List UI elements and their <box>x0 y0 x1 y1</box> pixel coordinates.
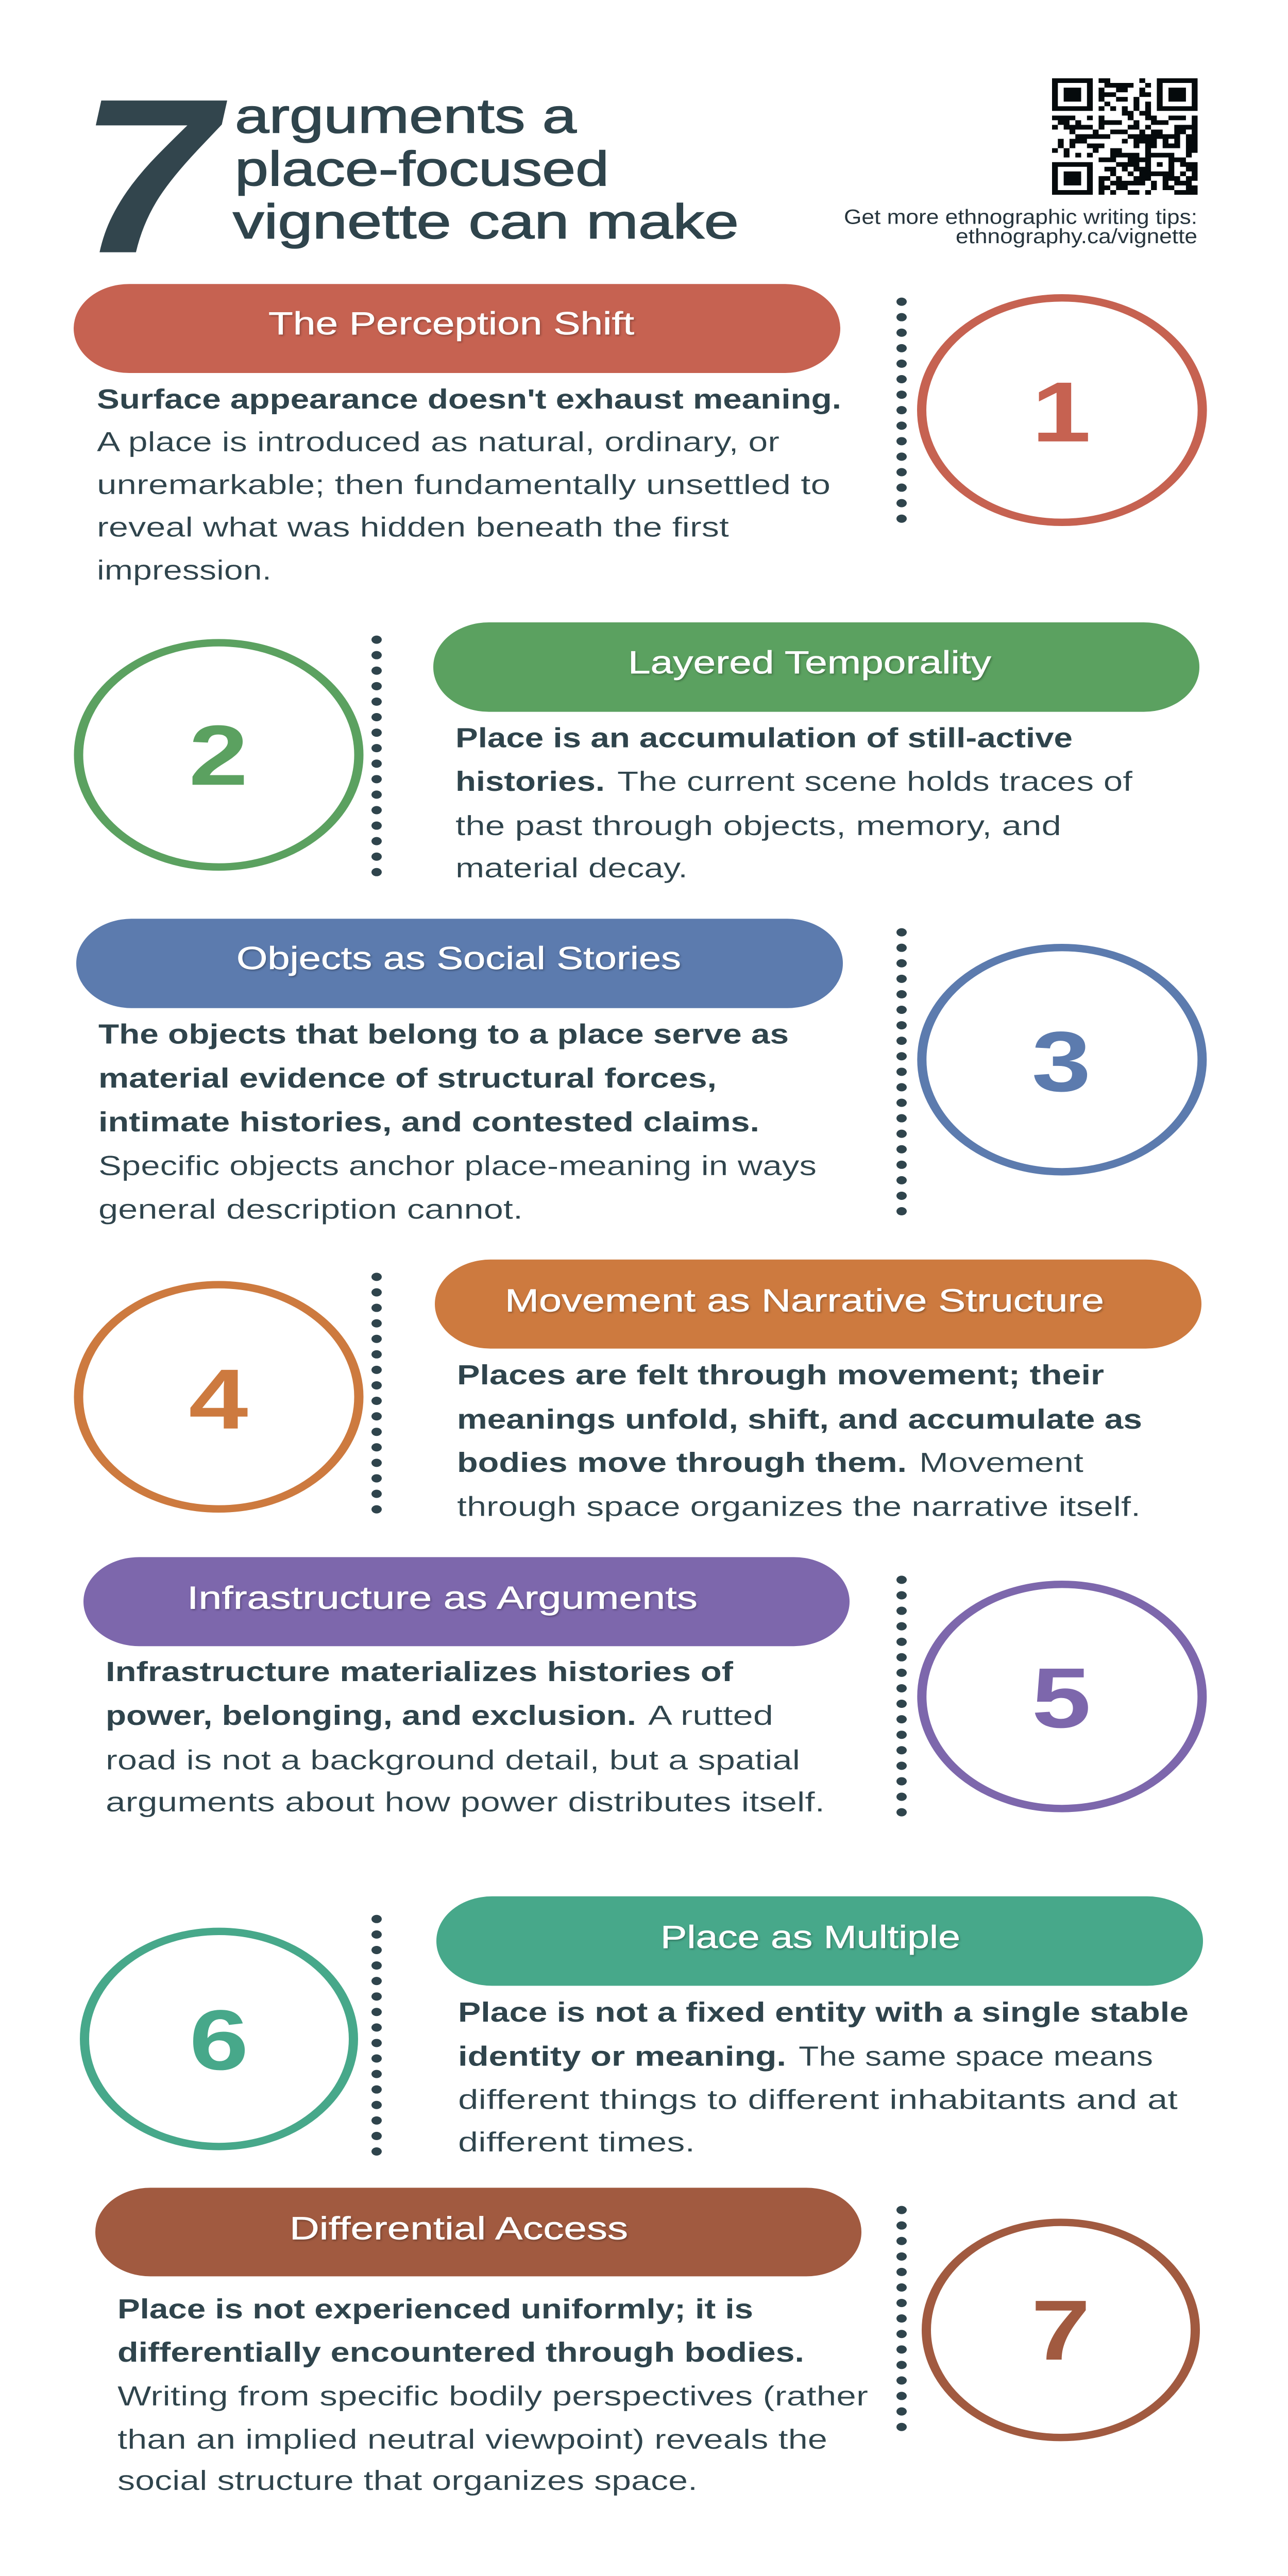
number badge 2: 2 <box>189 707 248 803</box>
body text: The same space means <box>799 2041 1153 2072</box>
body text: than an implied neutral viewpoint) reveals the <box>117 2424 827 2454</box>
body text: histories. <box>455 766 605 797</box>
title text: place-focused <box>235 141 609 196</box>
number badge 4: 4 <box>189 1351 248 1447</box>
panel: Movement as Narrative Structure <box>78 1260 1201 1522</box>
body text: different things to different inhabitants and at <box>458 2084 1178 2115</box>
credit text: ethnography.ca/vignette <box>956 225 1197 248</box>
dotted divider <box>371 640 382 873</box>
dotted divider <box>896 2210 907 2443</box>
body text <box>458 1996 1189 2157</box>
heading pill: Movement as Narrative Structure <box>505 1282 1104 1318</box>
credit text <box>844 205 1197 248</box>
number badge 6: 6 <box>189 1992 249 2088</box>
credit text: Get more ethnographic writing tips: <box>844 205 1197 228</box>
heading pill <box>433 622 1199 712</box>
number badge 5: 5 <box>1031 1650 1091 1745</box>
number badge 3 <box>922 947 1202 1172</box>
body text: general description cannot. <box>98 1194 523 1225</box>
body text: Place is not a fixed entity with a single stable <box>458 1996 1189 2027</box>
number badge 7: 7 <box>1031 2282 1091 2378</box>
body text: material evidence of structural forces, <box>98 1063 717 1094</box>
dotted divider <box>371 1277 382 1510</box>
body text <box>106 1656 825 1817</box>
body text: the past through objects, memory, and <box>455 810 1061 841</box>
number badge 6 <box>84 1931 353 2146</box>
panel: Infrastructure as Arguments <box>83 1557 1202 1817</box>
title text <box>233 89 739 249</box>
body text: Infrastructure materializes histories of <box>106 1656 734 1687</box>
body text: Specific objects anchor place-meaning in ways <box>98 1150 817 1181</box>
body text: The objects that belong to a place serve as <box>98 1019 789 1049</box>
body text: Surface appearance doesn't exhaust meaning. <box>97 383 841 414</box>
body text: unremarkable; then fundamentally unsettled to <box>97 469 831 500</box>
body text <box>455 722 1132 884</box>
body text <box>98 1019 817 1225</box>
body text: Movement <box>919 1447 1083 1478</box>
dotted divider <box>371 1919 382 2152</box>
heading pill <box>74 284 840 373</box>
body text: road is not a background detail, but a spatial <box>106 1744 800 1775</box>
title text: arguments a <box>235 89 577 143</box>
panel: Differential Access <box>95 2188 1195 2496</box>
panel: Objects as Social Stories <box>76 919 1202 1225</box>
dotted divider <box>896 302 907 534</box>
body text: Place is not experienced uniformly; it is <box>117 2293 753 2324</box>
big numeral 7: 7 <box>78 53 231 299</box>
body text: Place is an accumulation of still-active <box>455 722 1073 753</box>
heading pill <box>83 1557 850 1646</box>
number badge 3: 3 <box>1031 1013 1091 1109</box>
dotted divider <box>896 933 907 1211</box>
body text <box>117 2293 868 2496</box>
heading pill: Layered Temporality <box>628 645 992 680</box>
body text: Writing from specific bodily perspectives (rather <box>117 2380 868 2411</box>
body text: different times. <box>458 2126 695 2157</box>
number badge 4 <box>78 1285 359 1509</box>
number badge 5 <box>922 1584 1202 1808</box>
QR code <box>1052 78 1197 195</box>
number badge 7 <box>926 2223 1195 2437</box>
body text: impression. <box>97 554 272 585</box>
heading pill: Infrastructure as Arguments <box>187 1580 698 1616</box>
body text: reveal what was hidden beneath the first <box>97 512 729 543</box>
body text: through space organizes the narrative itself. <box>457 1491 1141 1522</box>
panel: Layered Temporality <box>78 622 1199 884</box>
body text: A rutted <box>648 1700 773 1731</box>
body text: A place is introduced as natural, ordinary, or <box>97 426 779 457</box>
body text: differentially encountered through bodies. <box>117 2336 804 2367</box>
title text: vignette can make <box>233 194 739 249</box>
number badge 1: 1 <box>1031 364 1091 460</box>
body text: material decay. <box>455 853 688 884</box>
body text <box>457 1360 1142 1522</box>
heading pill: Place as Multiple <box>660 1919 960 1955</box>
heading pill: The Perception Shift <box>268 305 634 341</box>
body text: intimate histories, and contested claims. <box>98 1106 759 1137</box>
body text: power, belonging, and exclusion. <box>106 1700 636 1731</box>
panel: Place as Multiple <box>84 1896 1203 2157</box>
number badge 2 <box>78 643 359 867</box>
heading pill <box>435 1260 1201 1349</box>
body text <box>97 383 841 585</box>
title <box>78 53 739 299</box>
dotted divider <box>896 1580 907 1812</box>
heading pill <box>436 1896 1203 1986</box>
panel: The Perception Shift <box>74 284 1202 585</box>
heading pill: Differential Access <box>290 2210 628 2246</box>
body text: The current scene holds traces of <box>617 766 1132 797</box>
body text: social structure that organizes space. <box>117 2465 698 2496</box>
heading pill: Objects as Social Stories <box>236 940 681 976</box>
heading pill <box>76 919 843 1008</box>
number badge 1 <box>922 298 1202 522</box>
body text: arguments about how power distributes itself. <box>106 1786 825 1817</box>
body text: bodies move through them. <box>457 1447 907 1478</box>
body text: meanings unfold, shift, and accumulate as <box>457 1403 1142 1434</box>
body text: Places are felt through movement; their <box>457 1360 1104 1391</box>
body text: identity or meaning. <box>458 2041 786 2072</box>
heading pill <box>95 2188 861 2276</box>
